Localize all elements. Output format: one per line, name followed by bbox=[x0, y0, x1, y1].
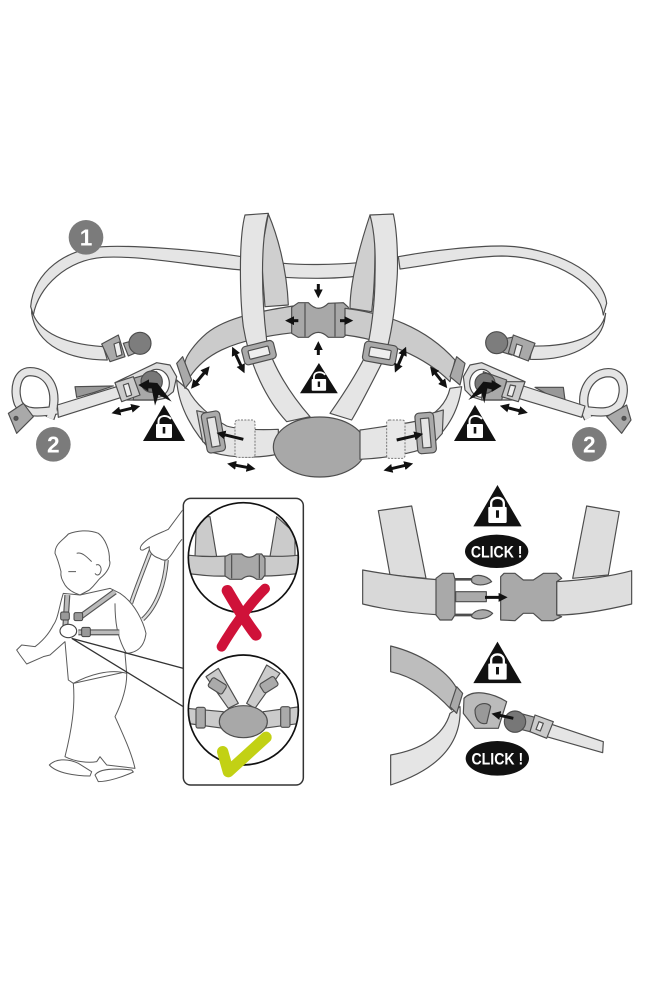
dashed keeper left bbox=[235, 420, 255, 457]
hip tab bbox=[450, 687, 463, 713]
lead end clip right bbox=[486, 332, 535, 361]
lock icon centre bbox=[300, 363, 338, 393]
chest strap left bbox=[185, 306, 293, 377]
top slider right bbox=[362, 341, 398, 366]
harness diagram right half bbox=[330, 214, 631, 470]
number badge 2 right: 2 bbox=[583, 431, 596, 457]
strap end tab right bbox=[450, 357, 465, 385]
waist slider right bbox=[415, 410, 443, 454]
lock icon upper bbox=[473, 485, 522, 526]
click badge lower bbox=[466, 741, 529, 776]
shoulder strap back right bbox=[350, 215, 375, 312]
handle loop right bbox=[582, 373, 623, 418]
number badge 2 left bbox=[36, 427, 71, 462]
child harness straps bbox=[61, 592, 119, 637]
handle loop left bbox=[16, 372, 57, 418]
number badge 2 right bbox=[572, 427, 607, 462]
side clip right bbox=[463, 363, 525, 402]
lead strap left bbox=[31, 246, 358, 360]
lock icon right bbox=[454, 405, 496, 441]
chest strap right bbox=[345, 308, 455, 382]
buckle click detail panel bbox=[363, 485, 632, 785]
female buckle bbox=[501, 573, 562, 621]
green check mark bbox=[223, 737, 266, 772]
arrows right bbox=[340, 321, 524, 470]
side strap left bbox=[57, 386, 122, 417]
strap end tab left bbox=[177, 357, 192, 388]
child and inset panel bbox=[17, 498, 303, 785]
left shoulder strap bbox=[378, 506, 426, 578]
hand strap bbox=[131, 548, 167, 619]
child figure bbox=[17, 531, 146, 782]
lead end clip left bbox=[102, 332, 151, 362]
strap tag right bbox=[607, 405, 631, 433]
oval chest pad bbox=[273, 417, 366, 477]
top slider left bbox=[241, 340, 277, 366]
shoulder strap back left bbox=[262, 214, 288, 307]
click badge upper bbox=[465, 535, 528, 568]
number badge 1: 1 bbox=[80, 224, 92, 250]
shoulder strap front right bbox=[330, 214, 398, 420]
harness instruction illustration bbox=[8, 212, 632, 786]
arrows left bbox=[115, 284, 318, 468]
inset circle correct bbox=[187, 655, 300, 765]
inset panel frame bbox=[183, 498, 303, 785]
dashed keeper right bbox=[387, 420, 405, 458]
harness diagram left half bbox=[8, 213, 366, 477]
click badge upper: CLICK ! bbox=[471, 542, 522, 561]
waist strap left bbox=[177, 380, 278, 457]
side strap right bbox=[518, 386, 585, 417]
side clip receiver bbox=[463, 693, 507, 728]
centre buckle bbox=[292, 303, 348, 337]
number badge 2 left: 2 bbox=[47, 431, 60, 457]
strap tag left bbox=[8, 403, 33, 433]
curved pointer arrow right bbox=[468, 380, 502, 403]
lock icon lower bbox=[473, 642, 522, 683]
red cross bbox=[222, 589, 265, 647]
plug arrow bbox=[495, 714, 513, 718]
lower hip band bbox=[391, 707, 460, 785]
chest clasp bbox=[60, 624, 77, 638]
upper hip band bbox=[391, 646, 457, 710]
waist slider left bbox=[197, 410, 226, 454]
curved pointer arrow left bbox=[138, 379, 172, 406]
insert arrow bbox=[485, 593, 504, 602]
number badge 1 bbox=[69, 220, 103, 255]
male buckle bbox=[436, 573, 493, 620]
inset circle incorrect bbox=[187, 503, 300, 613]
click badge lower: CLICK ! bbox=[471, 749, 523, 768]
side clip plug bbox=[504, 711, 603, 753]
side clip left bbox=[115, 363, 177, 402]
waist strap right bbox=[360, 387, 462, 459]
shoulder strap front left bbox=[240, 213, 310, 422]
lock icon left bbox=[143, 405, 185, 441]
lead strap right bbox=[398, 246, 607, 359]
right belt bbox=[557, 571, 632, 615]
zoom lines bbox=[72, 638, 183, 707]
left belt bbox=[363, 570, 442, 615]
right shoulder strap bbox=[573, 506, 619, 578]
adult hand holding lead bbox=[140, 510, 183, 560]
